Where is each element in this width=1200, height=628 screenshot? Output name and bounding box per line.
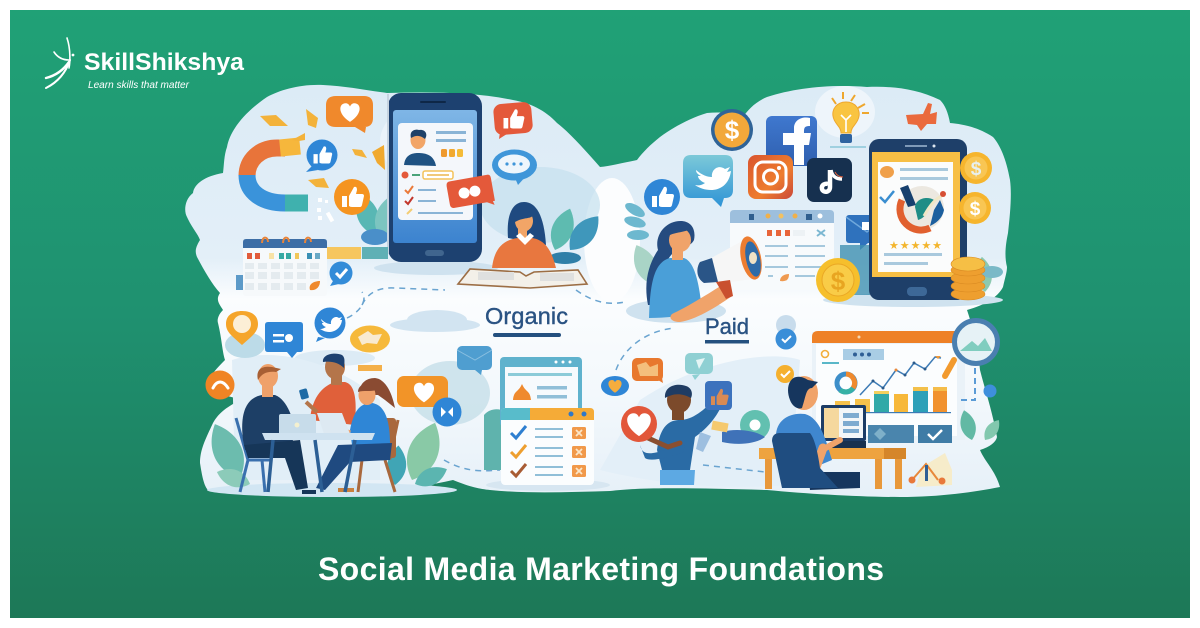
icon: TikTok xyxy=(807,158,852,202)
icon: leaves xyxy=(350,190,606,264)
icon: gold coin top: $ xyxy=(971,159,982,180)
illustration: woman reading xyxy=(458,202,587,288)
icon: location pin xyxy=(225,311,265,358)
icon: teal envelope bubble xyxy=(457,346,492,375)
icon: gold coin middle: $ xyxy=(970,199,981,220)
icon: large gold coin xyxy=(816,258,860,302)
icon: gold coin middle xyxy=(959,192,991,224)
icon: blue check circle xyxy=(776,315,796,350)
icon: heart bubble xyxy=(397,376,448,407)
section: Paid top xyxy=(623,92,1003,322)
donut chart xyxy=(900,185,946,230)
section: Paid bottom xyxy=(601,315,1004,490)
icon: blue like circle xyxy=(644,179,680,215)
icon: orange chat bubble xyxy=(632,358,663,383)
icon: red thumbs up bubble xyxy=(493,101,533,139)
megaphone xyxy=(697,234,765,299)
star rating: ★★★★★ xyxy=(889,240,942,252)
logo: SkillShikshya xyxy=(46,38,244,91)
icon: magnet xyxy=(247,146,308,203)
toolbar xyxy=(822,349,884,364)
dashed connector paths xyxy=(347,288,765,472)
icon: blue like bubble xyxy=(306,140,338,172)
icon: dollar coin: $ xyxy=(725,115,740,145)
icon: blue media circle xyxy=(432,398,462,426)
illustration: team at table xyxy=(236,354,398,494)
icon: orange arrow circle xyxy=(206,370,234,400)
illustration: gear and tags xyxy=(696,410,770,452)
icon: red video bubble xyxy=(446,174,496,213)
icon: teal message bubble xyxy=(685,353,713,380)
icon: heart speech bubble xyxy=(326,96,373,133)
profile card xyxy=(398,123,473,220)
man with phone xyxy=(299,354,356,425)
dashboard buttons xyxy=(868,425,952,443)
browser window xyxy=(730,210,834,290)
icon: small map pin card xyxy=(908,453,952,487)
icon: coin stack xyxy=(951,257,985,300)
logo wordmark: SkillShikshya xyxy=(84,49,244,76)
title: Social Media Marketing Foundations xyxy=(318,551,884,587)
heart badge xyxy=(621,406,657,442)
calendar xyxy=(236,238,327,296)
office chair xyxy=(772,433,838,488)
man with laptop xyxy=(242,364,316,494)
icon: dollar coin xyxy=(711,109,753,151)
icon: attraction sparks xyxy=(260,109,385,188)
label: Organic: Organic xyxy=(485,303,568,329)
bar chart xyxy=(821,387,951,413)
woman at table xyxy=(316,378,395,492)
icon: gold coin top xyxy=(960,152,992,184)
magnifier xyxy=(945,320,998,376)
icon: light bulb xyxy=(830,92,869,147)
icon: envelope xyxy=(846,215,888,250)
donut chart xyxy=(837,374,855,392)
icon: small white sparkles xyxy=(317,198,334,222)
icon: red hand xyxy=(906,103,937,131)
browser card xyxy=(484,357,582,470)
line chart xyxy=(860,356,941,395)
open book xyxy=(458,269,587,288)
progress bar behind phone xyxy=(327,247,388,259)
thumb tile xyxy=(705,381,732,410)
leaves xyxy=(623,200,1003,293)
illustration: cloud background xyxy=(185,85,1011,497)
icon: yellow bubble xyxy=(350,326,390,352)
icon: orange like circle xyxy=(334,179,370,215)
illustration: woman with megaphone xyxy=(646,221,765,322)
icon: Twitter circle xyxy=(314,308,346,342)
icon: large gold coin: $ xyxy=(831,266,846,296)
desk xyxy=(759,448,906,489)
seated man xyxy=(776,376,860,490)
icon: blue check bubble xyxy=(330,262,352,286)
logo tagline: Learn skills that matter xyxy=(88,80,190,91)
logo icon: figure xyxy=(46,38,74,88)
phone: organic profile xyxy=(387,93,482,262)
illustration: leaves behind team xyxy=(202,417,457,497)
checklist card xyxy=(501,408,594,485)
chairs xyxy=(236,418,398,492)
section: Organic bottom xyxy=(202,308,594,497)
icon: Twitter bubble xyxy=(683,155,733,207)
icon: yellow check bubble xyxy=(776,365,794,383)
icon: heart speech bubble small xyxy=(601,376,629,396)
icon: chat dots bubble xyxy=(492,150,537,185)
icon: Instagram xyxy=(748,155,793,199)
laptop xyxy=(821,405,866,448)
illustration: analyst at desk xyxy=(759,376,906,490)
dashboard window xyxy=(812,331,965,443)
label: Paid: Paid xyxy=(705,314,749,339)
table and laptops xyxy=(262,413,375,492)
icon: blue message bubble xyxy=(265,322,303,358)
section: Organic top xyxy=(236,93,606,296)
phone: paid analytics xyxy=(869,139,967,300)
icon: Facebook xyxy=(766,116,817,166)
right side connector xyxy=(957,368,1004,443)
illustration: boy with heart xyxy=(621,381,732,485)
